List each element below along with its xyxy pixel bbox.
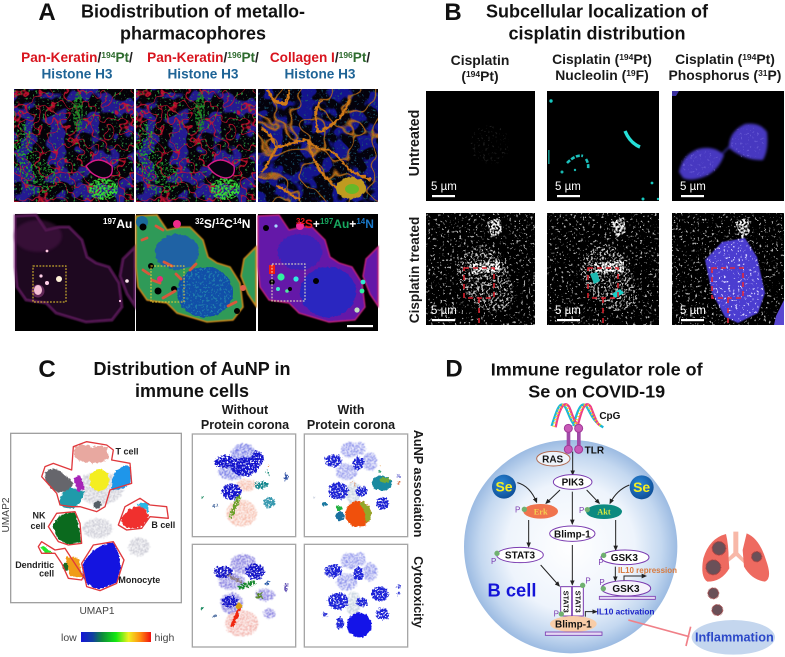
- tissue image 3: [258, 89, 378, 202]
- column header 3: Pt: [353, 50, 367, 65]
- column header 3: Histone H3: [284, 66, 356, 82]
- axis label UMAP1: UMAP1: [79, 606, 115, 617]
- label 32S/12C14N: N: [242, 217, 250, 231]
- column header cisplatin: (: [461, 68, 466, 84]
- inhibition arrow: [628, 620, 691, 646]
- image treated phosphorus: [672, 213, 784, 325]
- column header 2: /: [255, 50, 259, 65]
- column header cisplatin: Pt): [480, 68, 499, 84]
- STAT3: STAT3: [505, 551, 536, 562]
- column header nucleolin: Cisplatin (: [552, 51, 619, 67]
- GSK3 upper: P: [598, 558, 604, 567]
- column header 3: /: [366, 50, 370, 65]
- STAT3 dimer: STAT3: [562, 591, 571, 613]
- title B: cisplatin distribution: [508, 24, 686, 44]
- row label cisplatin treated: Cisplatin treated: [407, 217, 422, 323]
- B cell body: [464, 440, 677, 653]
- Blimp-1 promoter: Blimp-1: [555, 619, 592, 630]
- GSK3 upper: GSK3: [611, 553, 638, 564]
- label 32S+197Au+14N: S: [305, 217, 313, 231]
- tissue image 1: [14, 89, 134, 202]
- panel B: subcellular localization: [407, 0, 784, 325]
- column header phosphorus: 31: [758, 68, 768, 78]
- TLR receptor: [564, 424, 604, 457]
- PIK3: [553, 475, 592, 489]
- IL10 repression: IL10 repression: [618, 566, 677, 575]
- image untreated cisplatin: 5 µm: [431, 181, 457, 193]
- image untreated nucleolin: [547, 91, 659, 201]
- panel C: AuNP distribution: [1, 356, 425, 647]
- tissue image 2: [136, 89, 256, 202]
- column header nucleolin: 19: [626, 68, 636, 78]
- Blimp-1 upper: [550, 526, 595, 541]
- title B: Subcellular localization of: [486, 2, 708, 22]
- Blimp-1 promoter: [545, 610, 602, 635]
- colour legend: low: [61, 632, 77, 644]
- image untreated nucleolin: 5 µm: [555, 181, 581, 193]
- column header cisplatin: Cisplatin: [451, 52, 509, 68]
- GSK3 lower: GSK3: [612, 584, 640, 595]
- Se left: [492, 475, 516, 499]
- label 32S+197Au+14N: 14: [356, 217, 366, 226]
- header with corona: With: [338, 403, 364, 417]
- image treated phosphorus: 5 µm: [680, 305, 706, 317]
- colour legend: [61, 632, 175, 644]
- panel letter D: D: [445, 356, 463, 383]
- column header 2: Histone H3: [167, 66, 239, 82]
- title A: pharmacophores: [120, 24, 266, 44]
- cell-type outlines: [38, 442, 168, 591]
- RAS: [537, 451, 570, 466]
- column header 1: Pan-Keratin/: [21, 50, 101, 65]
- header with corona: Protein corona: [307, 418, 396, 432]
- plot cytotoxicity without corona: [192, 544, 296, 647]
- panel letter C: C: [38, 356, 56, 383]
- label 32S+197Au+14N: Au: [333, 217, 349, 231]
- header without corona: Protein corona: [201, 418, 290, 432]
- column header phosphorus: P): [768, 67, 781, 83]
- cluster labels: Monocyte: [118, 575, 160, 585]
- image untreated phosphorus: [672, 91, 784, 201]
- header without corona: Without: [222, 403, 268, 417]
- title C: Distribution of AuNP in: [94, 359, 290, 379]
- plot cytotoxicity with corona: [304, 544, 408, 647]
- label 32S/12C14N: 32: [195, 217, 204, 226]
- scale bar: [347, 325, 373, 327]
- Se right: [630, 475, 654, 499]
- label CpG: CpG: [599, 411, 621, 422]
- IL10 activation: IL10 activation: [597, 607, 655, 617]
- label 32S+197Au+14N: 32: [296, 217, 305, 226]
- UMAP main plot: [11, 433, 181, 603]
- cluster labels: B cell: [151, 520, 175, 530]
- column header 1: Pt: [115, 50, 130, 65]
- cluster labels: cell: [30, 521, 45, 531]
- STAT3 dimer: [561, 576, 591, 616]
- row label untreated: Untreated: [407, 110, 423, 176]
- pale background clusters: [77, 472, 150, 556]
- lungs: [702, 532, 769, 582]
- STAT3 dimer: P: [585, 576, 591, 585]
- GSK3 lower: [599, 578, 655, 599]
- label 32S+197Au+14N: +: [313, 217, 320, 231]
- image untreated phosphorus: 5 µm: [680, 181, 706, 193]
- column header phosphorus: 194: [742, 52, 757, 62]
- Akt: [579, 504, 622, 519]
- GSK3 lower: P: [599, 578, 605, 587]
- column header 1: /: [129, 50, 133, 65]
- axis label UMAP2: UMAP2: [1, 497, 12, 533]
- cluster labels: [15, 446, 175, 585]
- image treated nucleolin: [547, 213, 659, 325]
- title A: Biodistribution of metallo-: [81, 2, 305, 22]
- label TLR: TLR: [585, 446, 604, 457]
- column header 1: 194: [101, 50, 116, 60]
- column header 3: 196: [339, 50, 353, 60]
- inflammation: [692, 620, 775, 655]
- row label AuNP association: AuNP association: [411, 430, 425, 537]
- cluster labels: NK: [33, 510, 45, 520]
- label 32S/12C14N: 14: [233, 217, 242, 226]
- Se left: Se: [495, 478, 513, 494]
- column header nucleolin: Pt): [633, 51, 652, 67]
- panel A: biodistribution: [14, 0, 378, 331]
- Erk: Erk: [534, 507, 548, 516]
- PIK3: PIK3: [562, 478, 584, 489]
- column header nucleolin: F): [636, 67, 649, 83]
- label 32S+197Au+14N: +: [349, 217, 356, 231]
- STAT3: [491, 547, 543, 566]
- image treated cisplatin: [426, 213, 535, 325]
- Erk: P: [515, 506, 520, 515]
- image treated nucleolin: 5 µm: [555, 305, 581, 317]
- arrows: [517, 452, 646, 617]
- title D: Se on COVID-19: [528, 381, 665, 401]
- label 197Au: 197: [103, 217, 117, 226]
- column header nucleolin: 194: [619, 52, 634, 62]
- label 32S+197Au+14N: N: [365, 217, 374, 231]
- B cell label: B cell: [488, 580, 536, 601]
- STAT3 dimer: STAT3: [573, 591, 582, 613]
- image treated cisplatin: 5 µm: [431, 305, 457, 317]
- Blimp-1 upper: Blimp-1: [554, 529, 591, 540]
- plot association with corona: [304, 434, 408, 537]
- colour legend: high: [154, 632, 175, 644]
- cluster labels: cell: [39, 569, 54, 579]
- title D: Immune regulator role of: [491, 359, 703, 379]
- inflammation: Inflammation: [695, 631, 774, 645]
- plot association without corona: [192, 434, 296, 537]
- image 197Au: [14, 214, 135, 331]
- RAS: RAS: [542, 454, 564, 465]
- column header nucleolin: Nucleolin (: [555, 67, 627, 83]
- Blimp-1 promoter: P: [554, 610, 559, 619]
- Akt: Akt: [597, 508, 611, 517]
- Akt: P: [579, 506, 584, 515]
- column header phosphorus: Pt): [756, 51, 775, 67]
- panel D: immune regulator role of Se: [445, 356, 775, 655]
- column header phosphorus: Phosphorus (: [669, 67, 758, 83]
- label 197Au: Au: [116, 217, 132, 231]
- virus particles: [706, 542, 762, 615]
- column header 2: Pan-Keratin/: [147, 50, 227, 65]
- image 32S/12C14N: [136, 214, 256, 331]
- label 32S/12C14N: C: [224, 217, 233, 231]
- column header cisplatin: 194: [466, 69, 480, 79]
- title C: immune cells: [135, 381, 249, 401]
- cluster labels: T cell: [116, 446, 138, 456]
- GSK3 upper: [598, 550, 649, 567]
- cell clusters: [41, 445, 149, 589]
- image untreated cisplatin: [426, 91, 535, 201]
- Erk: [515, 504, 558, 519]
- column header 3: Collagen I/: [270, 50, 339, 65]
- column header 2: Pt: [241, 50, 256, 65]
- Se right: Se: [633, 479, 650, 495]
- label 32S/12C14N: 12: [215, 217, 225, 226]
- column header 2: 196: [227, 50, 242, 60]
- plots: [192, 434, 408, 647]
- label 32S/12C14N: S/: [204, 217, 216, 231]
- label 32S+197Au+14N: 197: [320, 217, 334, 226]
- column header 1: Histone H3: [41, 66, 113, 82]
- STAT3: P: [491, 557, 496, 566]
- column header phosphorus: Cisplatin (: [675, 51, 742, 67]
- image merged S Au N: [258, 214, 378, 331]
- cluster labels: Dendritic: [15, 560, 54, 570]
- CpG DNA: [552, 404, 621, 427]
- row label cytotoxicity: Cytotoxicity: [411, 556, 425, 628]
